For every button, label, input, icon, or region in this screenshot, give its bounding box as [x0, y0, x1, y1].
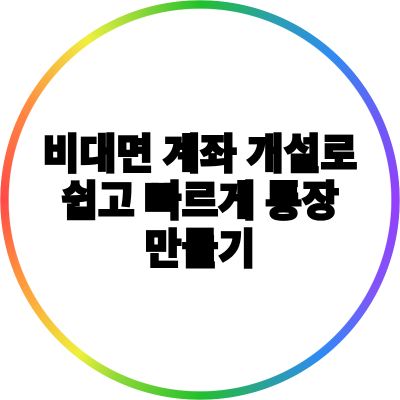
title: 만들기: [145, 227, 255, 273]
title: [43, 132, 357, 273]
title: 쉽고 빠르게 통장: [61, 179, 339, 225]
title: 비대면 계좌 개설로: [43, 132, 357, 178]
